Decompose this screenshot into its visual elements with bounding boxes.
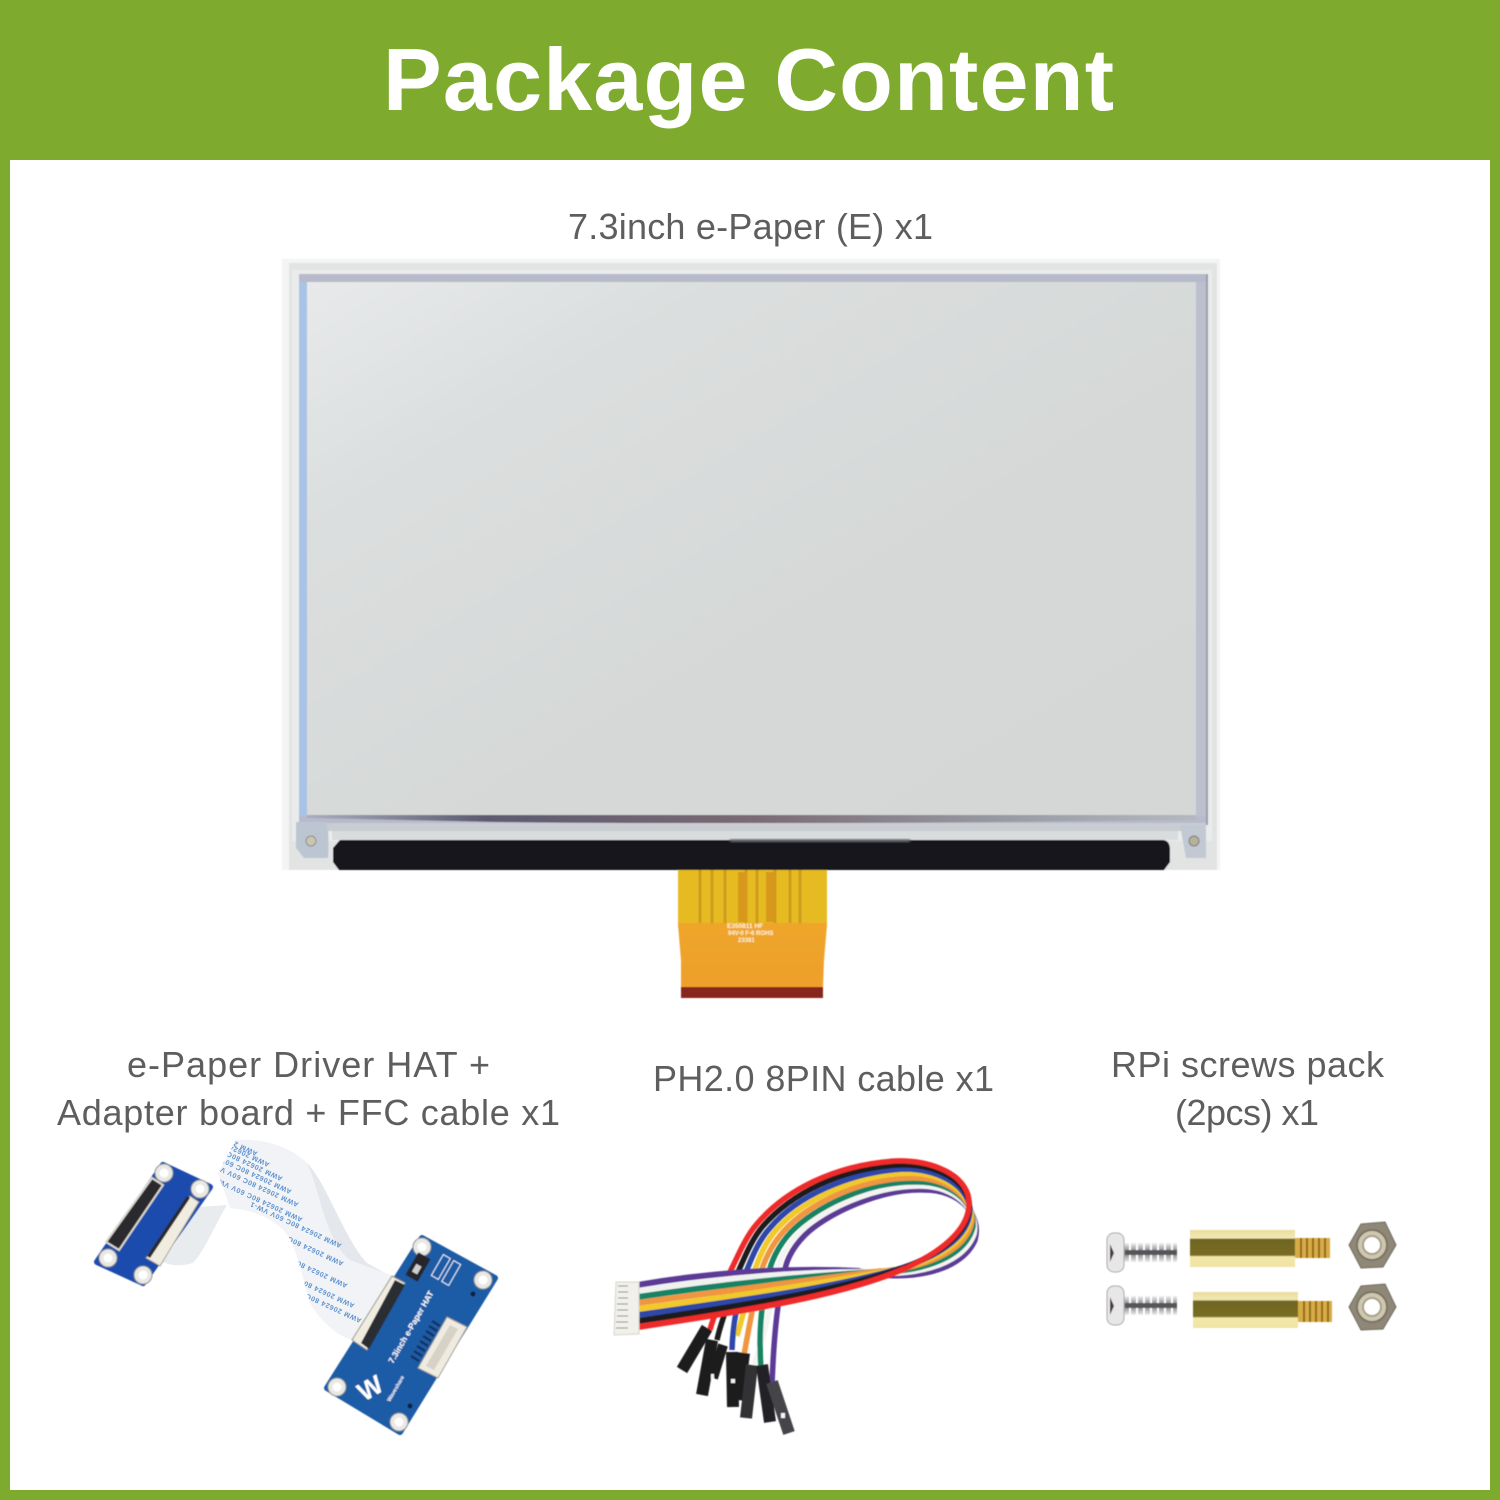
corner tab right xyxy=(1180,825,1206,858)
FFC ribbon main section: AWM 20624 80C 60V VW-1 xyxy=(190,1133,284,1182)
label: e-Paper display: 7.3inch e-Paper (E) x1 xyxy=(568,206,933,247)
hex nut bottom xyxy=(1349,1284,1396,1330)
adapter board xyxy=(97,1164,210,1284)
switch legend xyxy=(431,1255,461,1285)
lower edge streak xyxy=(307,815,1196,823)
photo: RPi screws pack xyxy=(1107,1222,1396,1330)
FFC ribbon rear section xyxy=(163,1205,227,1265)
photo: 7.3 inch e-Paper display xyxy=(282,259,1220,998)
FFC ribbon main section: AWM 20624 80C 60V VW-1 xyxy=(255,1240,349,1289)
label: screws pack: RPi screws pack xyxy=(1111,1044,1385,1085)
label: PH2.0 cable: PH2.0 8PIN cable x1 xyxy=(653,1058,994,1099)
SPI switch xyxy=(405,1252,431,1282)
hex nut top xyxy=(1349,1222,1396,1268)
display grey frame xyxy=(289,263,1217,870)
flexible printed cable: 23381 xyxy=(738,938,755,944)
screw top xyxy=(1107,1233,1177,1272)
flexible printed cable: 94V-0 F-6 ROHS xyxy=(728,931,773,937)
screw bottom xyxy=(1107,1286,1177,1325)
HAT board: Waveshare xyxy=(387,1375,406,1403)
FFC ribbon main section: AWM 20624 80C 60V VW-1 xyxy=(251,1218,345,1267)
solder pads xyxy=(411,1321,440,1361)
brass standoff top xyxy=(1190,1230,1330,1267)
label: driver HAT xyxy=(57,1044,560,1133)
Waveshare logo: W xyxy=(352,1369,389,1407)
FFC connector on HAT xyxy=(352,1276,405,1350)
label: screws pack: (2pcs) x1 xyxy=(1175,1092,1319,1133)
display glass outer edge xyxy=(282,259,1220,870)
flexible printed cable: E350811 HF xyxy=(727,923,763,930)
display blue border xyxy=(299,274,1207,825)
label: driver HAT: Adapter board + FFC cable x1 xyxy=(57,1092,560,1133)
FFC ribbon main section: AWM 20624 80C 60V VW-1 xyxy=(262,1260,356,1309)
board label: 7.3inch e-Paper HAT xyxy=(386,1288,436,1365)
FFC ribbon main section: AWM 20624 80C 60V VW-1 xyxy=(177,1119,271,1168)
corner tab left xyxy=(296,822,329,858)
HAT board xyxy=(327,1238,495,1432)
title: Package Content xyxy=(383,30,1114,129)
flexible printed cable xyxy=(678,870,827,998)
FFC ribbon main section: AWM 20624 80C 60V VW-1 xyxy=(210,1174,304,1223)
FFC ribbon main section: AWM 20624 80C 60V VW-1 xyxy=(249,1200,343,1249)
black bezel bar xyxy=(333,840,1170,870)
jumper housings xyxy=(682,1328,789,1433)
FFC ribbon main section: AWM 20624 80C 60V VW-1 xyxy=(199,1146,293,1195)
FFC ribbon main section: AWM 20624 80C 60V VW-1 xyxy=(206,1159,300,1208)
label: driver HAT: e-Paper Driver HAT + xyxy=(127,1044,490,1085)
photo: PH2.0 8 pin cable xyxy=(614,1161,976,1433)
jumper latches xyxy=(711,1374,785,1418)
FFC ribbon main section: AWM 20624 80C 60V VW-1 xyxy=(165,1108,259,1157)
front wire band xyxy=(638,1268,906,1327)
label: screws pack xyxy=(1111,1044,1385,1133)
white PH2.0 connector xyxy=(614,1282,639,1335)
brass standoff bottom xyxy=(1193,1292,1332,1328)
8 pin socket xyxy=(418,1317,467,1378)
FFC ribbon main section: AWM 20624 80C 60V VW-1 xyxy=(269,1275,363,1324)
FFC ribbon main section xyxy=(218,1140,392,1340)
wire loop behind xyxy=(710,1161,976,1385)
photo: driver HAT, adapter board and FFC cable xyxy=(97,1108,495,1432)
active screen area xyxy=(307,282,1196,815)
